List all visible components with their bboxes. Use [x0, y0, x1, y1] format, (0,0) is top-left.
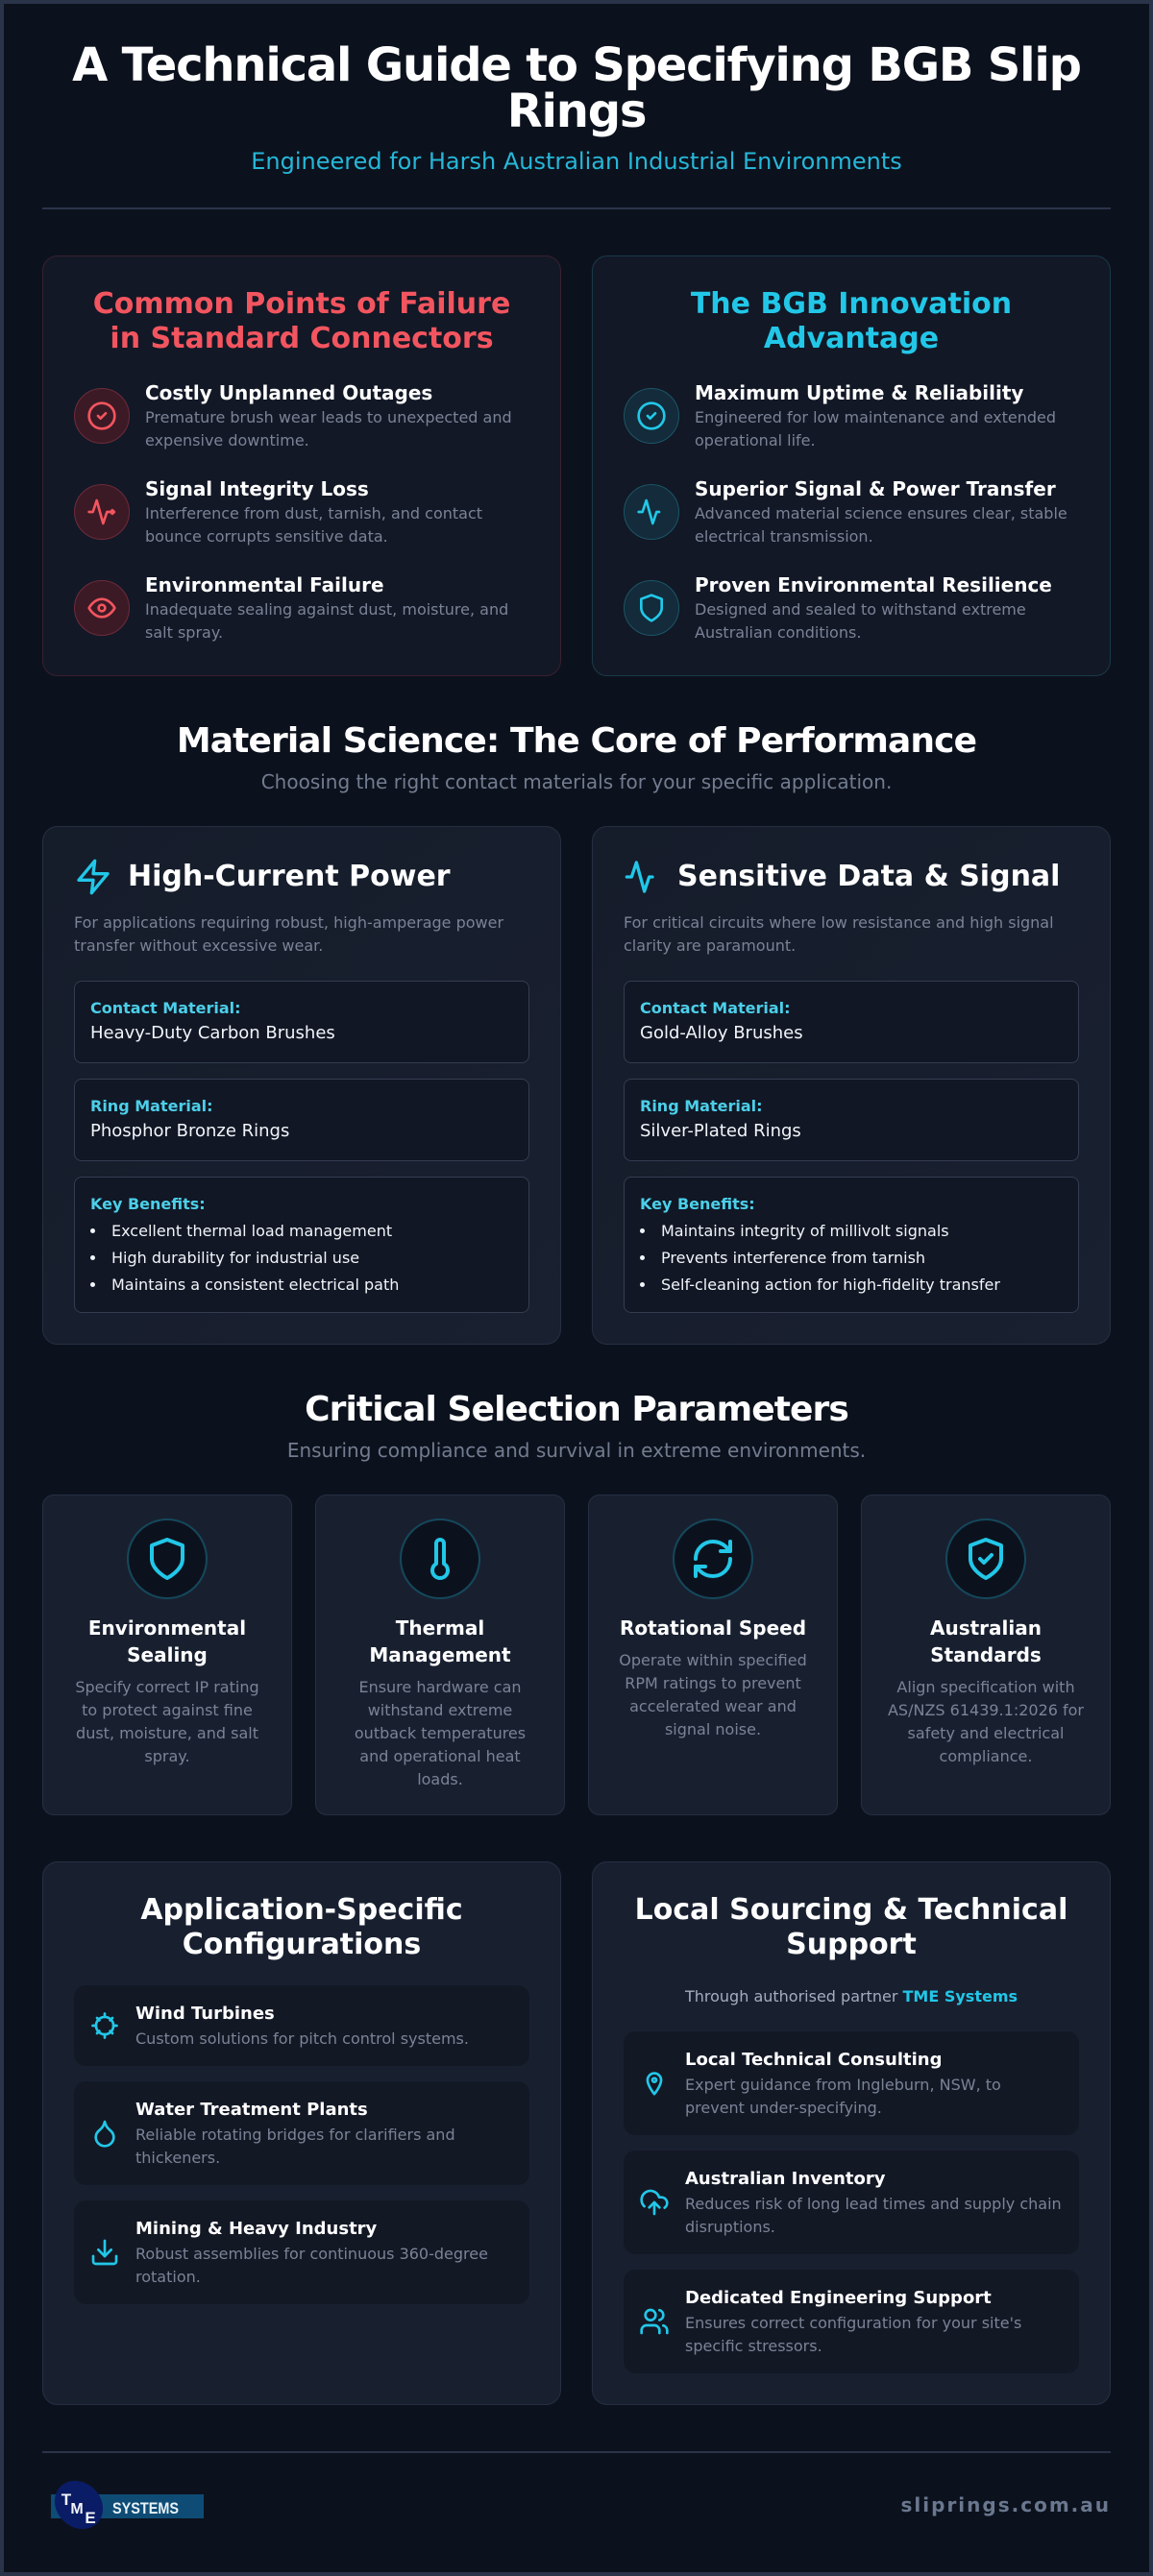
logo: TME Systems: E: [85, 2509, 96, 2527]
ring material box: Silver-Plated Rings: [640, 1121, 801, 1141]
panel: common points of failure: [42, 255, 561, 676]
panel: BGB innovation advantage: [592, 255, 1111, 676]
icon: cog: [91, 2012, 118, 2039]
panel heading: sourcing: Local Sourcing & Technical Support: [635, 1893, 1067, 1961]
text: inventory: Australian Inventory: [685, 2169, 886, 2189]
text: outages: [145, 381, 512, 450]
advantage list: [624, 381, 1067, 642]
icon: circled check: [624, 388, 679, 444]
icon: thermometer: [400, 1519, 480, 1599]
text: signal: Interference from dust, tarnish, and contact bounce corrupts sensitive data.: [145, 504, 482, 546]
contact material box: [74, 981, 529, 1063]
panel heading: signal: Sensitive Data & Signal: [677, 860, 1060, 893]
section heading: material science: Choosing the right contact materials for your specific application.: [261, 770, 892, 793]
item: superior signal: [624, 477, 1067, 546]
description: signal: For critical circuits where low resistance and high signal clarity are paramount.: [624, 913, 1054, 955]
icon: shield: [624, 580, 679, 636]
material panels: [42, 826, 1111, 1345]
contact material box: Heavy-Duty Carbon Brushes: [90, 1023, 335, 1043]
text: signal transfer: Superior Signal & Power Transfer: [695, 477, 1056, 500]
text: signal transfer: Advanced material science ensures clear, stable electrical transmission.: [695, 504, 1067, 546]
partner line: Through authorised partner TME Systems: [685, 1987, 1018, 2005]
key benefits box: Key Benefits:: [640, 1195, 755, 1213]
key benefits box: Self-cleaning action for high-fidelity transfer: [661, 1276, 1000, 1294]
section heading: critical selection parameters: [287, 1390, 866, 1462]
contact material box: Gold-Alloy Brushes: [640, 1023, 803, 1043]
text: mining: Mining & Heavy Industry: [135, 2219, 377, 2239]
parameter cards: [42, 1495, 1111, 1815]
text: engineering support: Ensures correct configuration for your site's specific stressors.: [685, 2314, 1021, 2355]
icon: pulse with diamond: [74, 484, 130, 540]
text: environmental: [145, 573, 508, 642]
section heading: material science: [177, 721, 976, 793]
icon: cloud upload: [640, 2190, 669, 2215]
item: maximum uptime: [624, 381, 1056, 450]
row: mining: [74, 2200, 529, 2304]
key benefits box: Prevents interference from tarnish: [661, 1249, 925, 1267]
header: [42, 42, 1111, 209]
row: engineering support: [624, 2270, 1079, 2373]
text: outages: Premature brush wear leads to unexpected and expensive downtime.: [145, 408, 512, 450]
row: local consulting: [624, 2031, 1079, 2135]
card text: Align specification with AS/NZS 61439.1:2026 for safety and electrical compliance.: [888, 1678, 1084, 1765]
key benefits box: High durability for industrial use: [111, 1249, 359, 1267]
key benefits box: Maintains integrity of millivolt signals: [661, 1222, 949, 1240]
key benefits box: Maintains a consistent electrical path: [111, 1276, 399, 1294]
card text: Specify correct IP rating to protect against fine dust, moisture, and salt spray.: [75, 1678, 259, 1765]
card text: Operate within specified RPM ratings to prevent accelerated wear and signal noise.: [619, 1651, 807, 1738]
row: water treatment: [74, 2081, 529, 2185]
card text: Ensure hardware can withstand extreme outback temperatures and operational heat loads.: [355, 1678, 526, 1788]
application list: [74, 1985, 529, 2304]
card: thermal management: [315, 1495, 565, 1815]
icon: droplet: [94, 2121, 115, 2148]
icon: shield: [127, 1519, 208, 1599]
title: A Technical Guide to Specifying BGB Slip Rings: [72, 38, 1081, 138]
text: consulting: Expert guidance from Ingleburn, NSW, to prevent under-specifying.: [685, 2076, 1001, 2117]
text: outages: Costly Unplanned Outages: [145, 381, 432, 404]
text: resilience: Designed and sealed to withstand extreme Australian conditions.: [695, 600, 1026, 642]
item: costly unplanned outages: [74, 381, 512, 450]
contact material box: Contact Material:: [640, 999, 791, 1017]
panel: application-specific configurations: [42, 1861, 561, 2405]
contact material box: Contact Material:: [90, 999, 241, 1017]
icon: pulse: [624, 484, 679, 540]
card: australian standards: [861, 1495, 1111, 1815]
lower panels: [42, 1861, 1111, 2405]
icon: map pin: [646, 2072, 663, 2096]
card title: Rotational Speed: [620, 1616, 806, 1640]
failure list: [74, 381, 512, 642]
text: wind turbines: Custom solutions for pitch control systems.: [135, 2029, 469, 2048]
panel heading: advantage: The BGB Innovation Advantage: [691, 287, 1012, 355]
panel: high-current power: [42, 826, 561, 1345]
text: uptime: Maximum Uptime & Reliability: [695, 381, 1023, 404]
text: wind turbines: [135, 2004, 469, 2048]
text: water treatment: [135, 2100, 455, 2167]
row: wind turbines: [74, 1985, 529, 2066]
key benefits box: [624, 1177, 1079, 1313]
text: consulting: [685, 2050, 1001, 2117]
panel heading: failure: Common Points of Failure in Standard Connectors: [93, 287, 510, 355]
text: water treatment: Water Treatment Plants: [135, 2100, 368, 2120]
text: wind turbines: Wind Turbines: [135, 2004, 275, 2024]
text: resilience: [695, 573, 1052, 642]
text: environmental: Inadequate sealing against dust, moisture, and salt spray.: [145, 600, 508, 642]
icon: eye: [74, 580, 130, 636]
text: environmental: Environmental Failure: [145, 573, 384, 596]
icon: shield check: [945, 1519, 1026, 1599]
text: uptime: Engineered for low maintenance and extended operational life.: [695, 408, 1056, 450]
comparison panels: [42, 255, 1111, 676]
card title: Environmental Sealing: [88, 1616, 246, 1666]
text: water treatment: Reliable rotating bridges for clarifiers and thickeners.: [135, 2126, 455, 2167]
panel heading: applications: Application-Specific Configurations: [140, 1893, 463, 1961]
text: signal: [145, 477, 482, 546]
icon: download tray: [92, 2240, 117, 2265]
icon: circled check: [74, 388, 130, 444]
item: proven resilience: [624, 573, 1052, 642]
ring material box: Ring Material:: [90, 1097, 213, 1115]
icon: users: [640, 2309, 669, 2334]
ring material box: Ring Material:: [640, 1097, 763, 1115]
description: power: For applications requiring robust, high-amperage power transfer without excessive wear.: [74, 913, 503, 955]
website url: sliprings.com.au: [901, 2493, 1111, 2516]
logo: TME Systems: [51, 2480, 204, 2530]
subtitle: Engineered for Harsh Australian Industrial Environments: [251, 148, 902, 175]
ring material box: [74, 1079, 529, 1161]
panel: local sourcing and technical support: [592, 1861, 1111, 2405]
text: engineering support: [685, 2288, 1021, 2355]
text: consulting: Local Technical Consulting: [685, 2050, 942, 2070]
contact material box: [624, 981, 1079, 1063]
text: inventory: [685, 2169, 1062, 2236]
key benefits box: Key Benefits:: [90, 1195, 206, 1213]
card: rotational speed: [588, 1495, 838, 1815]
card: environmental sealing: [42, 1495, 292, 1815]
text: engineering support: Dedicated Engineering Support: [685, 2288, 992, 2308]
text: inventory: Reduces risk of long lead times and supply chain disruptions.: [685, 2195, 1062, 2236]
panel heading: power: High-Current Power: [128, 860, 451, 893]
text: signal transfer: [695, 477, 1067, 546]
icon: refresh arrows: [673, 1519, 753, 1599]
key benefits box: Excellent thermal load management: [111, 1222, 392, 1240]
support list: [624, 2031, 1079, 2373]
logo: TME Systems: M: [70, 2501, 84, 2517]
card title: Australian Standards: [930, 1616, 1042, 1666]
ring material box: [624, 1079, 1079, 1161]
logo: TME Systems: T: [61, 2491, 72, 2509]
item: environmental failure: [74, 573, 508, 642]
footer divider: [42, 2451, 1111, 2453]
text: signal: Signal Integrity Loss: [145, 477, 369, 500]
text: uptime: [695, 381, 1056, 450]
text: mining: [135, 2219, 488, 2286]
section heading: critical selection parameters: Critical Selection Parameters: [305, 1390, 848, 1429]
ring material box: Phosphor Bronze Rings: [90, 1121, 289, 1141]
item: signal integrity loss: [74, 477, 482, 546]
text: resilience: Proven Environmental Resilience: [695, 573, 1052, 596]
key benefits box: [74, 1177, 529, 1313]
row: inventory: [624, 2151, 1079, 2254]
panel: sensitive data and signal: [592, 826, 1111, 1345]
card title: Thermal Management: [369, 1616, 511, 1666]
section heading: critical selection parameters: Ensuring compliance and survival in extreme environments.: [287, 1439, 866, 1462]
text: mining: Robust assemblies for continuous 360-degree rotation.: [135, 2245, 488, 2286]
section heading: material science: Material Science: The Core of Performance: [177, 721, 976, 761]
logo: TME Systems: SYSTEMS: [112, 2499, 179, 2517]
